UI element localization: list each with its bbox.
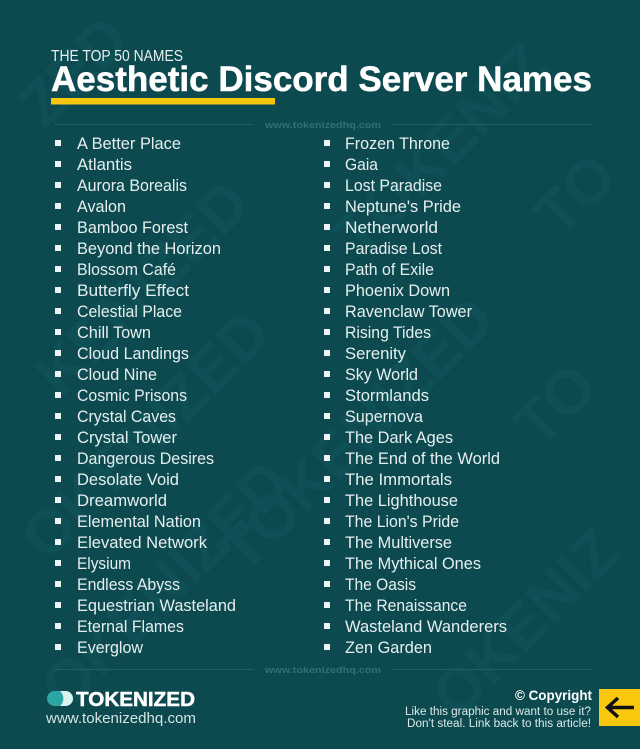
The Oasis: The Oasis — [345, 575, 416, 594]
background watermark pattern: TO — [521, 141, 630, 250]
Frozen Throne: Frozen Throne — [345, 134, 450, 153]
Cloud Nine: Cloud Nine — [77, 365, 157, 384]
Gaia — [324, 155, 378, 174]
Cloud Landings: Cloud Landings — [77, 344, 189, 363]
Serenity: Serenity — [345, 344, 406, 363]
Avalon: Avalon — [77, 197, 126, 216]
Gaia: Gaia — [345, 155, 378, 174]
Desolate Void: Desolate Void — [77, 470, 179, 489]
Elevated Network: Elevated Network — [77, 533, 207, 552]
background watermark pattern: OKENIZ — [418, 516, 633, 731]
The Lighthouse: The Lighthouse — [345, 491, 458, 510]
copyright notice: Like this graphic and want to use it? — [405, 706, 591, 718]
Beyond the Horizon: Beyond the Horizon — [77, 239, 221, 258]
The Immortals: The Immortals — [345, 470, 452, 489]
copyright notice: Don't steal. Link back to this article! — [407, 718, 591, 730]
Butterfly Effect: Butterfly Effect — [77, 281, 189, 300]
arrow button — [599, 689, 640, 726]
Eternal Flames: Eternal Flames — [77, 617, 184, 636]
Bamboo Forest: Bamboo Forest — [77, 218, 188, 237]
footer logo — [47, 689, 195, 711]
background watermark pattern: OKENIZED — [28, 448, 303, 723]
Paradise Lost: Paradise Lost — [345, 239, 442, 258]
icon: tokenized logo mark — [47, 691, 73, 706]
Path of Exile: Path of Exile — [345, 260, 434, 279]
background watermark pattern: TOKENIZED — [206, 284, 507, 585]
Netherworld: Netherworld — [345, 218, 438, 237]
Crystal Tower: Crystal Tower — [77, 428, 177, 447]
eyebrow heading: THE TOP 50 NAMES — [51, 48, 183, 65]
Elysium: Elysium — [77, 554, 131, 573]
The End of the World: The End of the World — [345, 449, 500, 468]
background watermark pattern: KENIZED — [22, 168, 263, 409]
The Lion's Pride: The Lion's Pride — [345, 512, 459, 531]
The Dark Ages: The Dark Ages — [345, 428, 453, 447]
Stormlands: Stormlands — [345, 386, 429, 405]
Elysium — [55, 554, 131, 573]
Lost Paradise: Lost Paradise — [345, 176, 442, 195]
Endless Abyss: Endless Abyss — [77, 575, 180, 594]
Avalon — [55, 197, 126, 216]
copyright notice: © Copyright — [515, 688, 592, 703]
Neptune's Pride: Neptune's Pride — [345, 197, 461, 216]
Elemental Nation: Elemental Nation — [77, 512, 201, 531]
The Renaissance: The Renaissance — [345, 596, 467, 615]
The Multiverse: The Multiverse — [345, 533, 452, 552]
title: Aesthetic Discord Server Names — [51, 60, 592, 99]
Ravenclaw Tower: Ravenclaw Tower — [345, 302, 472, 321]
logo wordmark: TOKENIZED — [76, 689, 195, 711]
copyright notice — [405, 688, 592, 730]
Everglow: Everglow — [77, 638, 144, 657]
background watermark pattern: ZED — [6, 3, 143, 140]
Atlantis: Atlantis — [77, 155, 132, 174]
Dangerous Desires: Dangerous Desires — [77, 449, 214, 468]
Phoenix Down: Phoenix Down — [345, 281, 450, 300]
The Mythical Ones: The Mythical Ones — [345, 554, 481, 573]
title underline — [51, 98, 275, 104]
Supernova: Supernova — [345, 407, 424, 426]
Wasteland Wanderers: Wasteland Wanderers — [345, 617, 507, 636]
Chill Town: Chill Town — [77, 323, 151, 342]
background watermark pattern: TOKENIZ — [321, 29, 562, 270]
Zen Garden: Zen Garden — [345, 638, 432, 657]
icon: left arrow — [608, 698, 634, 717]
right name list — [324, 134, 507, 657]
A Better Place: A Better Place — [77, 134, 181, 153]
background watermark pattern: TO — [501, 351, 610, 460]
Equestrian Wasteland: Equestrian Wasteland — [77, 596, 236, 615]
Sky World: Sky World — [345, 365, 418, 384]
bottom divider with url: www.tokenizedhq.com — [264, 665, 381, 676]
left name list — [55, 134, 236, 657]
top divider with url: www.tokenizedhq.com — [264, 120, 381, 131]
Crystal Caves: Crystal Caves — [77, 407, 176, 426]
footer url: www.tokenizedhq.com — [45, 710, 196, 727]
Celestial Place: Celestial Place — [77, 302, 182, 321]
Cosmic Prisons: Cosmic Prisons — [77, 386, 187, 405]
background watermark pattern: OKENIZED — [8, 298, 283, 573]
Dreamworld: Dreamworld — [77, 491, 167, 510]
Rising Tides: Rising Tides — [345, 323, 431, 342]
Blossom Café: Blossom Café — [77, 260, 176, 279]
Aurora Borealis: Aurora Borealis — [77, 176, 187, 195]
